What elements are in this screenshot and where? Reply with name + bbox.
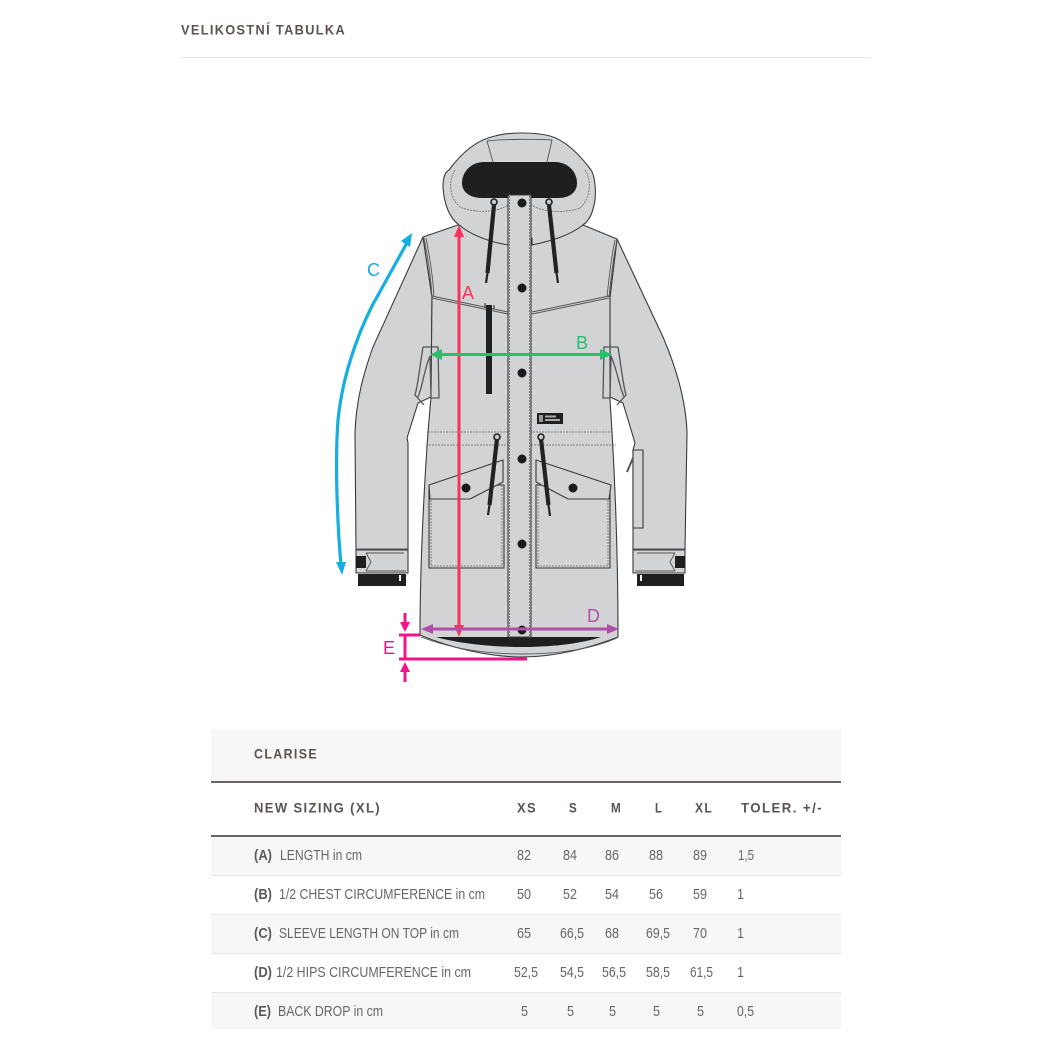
hood <box>443 133 595 245</box>
title: VELIKOSTNÍ TABULKA <box>181 22 346 38</box>
table name band: CLARISE <box>254 746 318 762</box>
row A: 82 <box>517 847 531 864</box>
buttons <box>462 198 578 634</box>
row D <box>254 964 744 981</box>
column header row <box>211 781 841 837</box>
left sleeve <box>355 237 432 586</box>
arrow A: length <box>454 225 474 637</box>
row C: SLEEVE LENGTH ON TOP in cm <box>279 925 459 942</box>
arrow D: hips: D <box>587 606 600 626</box>
column header row: L <box>655 800 663 816</box>
hem <box>421 637 617 654</box>
left side tab <box>415 347 439 405</box>
front placket <box>508 195 531 637</box>
arrow E: back drop <box>383 613 527 682</box>
arrow B: chest: B <box>576 333 588 353</box>
jacket illustration <box>355 133 687 657</box>
column header row: XS <box>517 800 537 816</box>
row E: 0,5 <box>737 1003 754 1020</box>
row E: (E) <box>254 1004 271 1020</box>
row B: 54 <box>605 886 619 903</box>
row C: 70 <box>693 925 707 942</box>
row A <box>211 837 841 875</box>
right side tab <box>603 347 626 405</box>
row C: (C) <box>254 926 272 942</box>
chest zip <box>485 303 494 394</box>
row B: 52 <box>563 886 577 903</box>
row D: 52,5 <box>514 964 538 981</box>
row E: 5 <box>567 1003 574 1020</box>
row C: 68 <box>605 925 619 942</box>
row D: 56,5 <box>602 964 626 981</box>
jacket body <box>420 225 618 657</box>
row A: (A) <box>254 848 272 864</box>
row B: 59 <box>693 886 707 903</box>
row D: (D) <box>254 965 272 981</box>
row A: LENGTH in cm <box>280 847 362 864</box>
row D: 61,5 <box>690 964 713 981</box>
row B: 1 <box>737 886 744 903</box>
row D: 58,5 <box>646 964 670 981</box>
brand label <box>537 413 563 424</box>
row D: 54,5 <box>560 964 584 981</box>
column header row: M <box>611 800 622 816</box>
arrow D: hips <box>421 606 619 634</box>
row A: 88 <box>649 847 663 864</box>
row A: 86 <box>605 847 619 864</box>
arrow A: length: A <box>462 283 474 303</box>
arrow B: chest <box>430 333 612 360</box>
arrow E: back drop: E <box>383 638 395 658</box>
right sleeve <box>610 239 687 586</box>
right pocket <box>536 460 611 568</box>
row E: 5 <box>653 1003 660 1020</box>
row C <box>211 915 841 953</box>
column header row: TOLER. +/- <box>741 800 823 816</box>
row A: 84 <box>563 847 577 864</box>
row D: 1 <box>737 964 744 981</box>
column header row: XL <box>695 800 713 816</box>
table name band <box>211 729 841 781</box>
size table <box>211 729 841 1029</box>
row C: 65 <box>517 925 531 942</box>
row A: 89 <box>693 847 707 864</box>
row B: 56 <box>649 886 663 903</box>
row B: 1/2 CHEST CIRCUMFERENCE in cm <box>279 886 485 903</box>
row B <box>254 886 744 903</box>
row A: 1,5 <box>738 847 754 864</box>
row C: 66,5 <box>560 925 584 942</box>
seams <box>424 238 617 445</box>
column header row: NEW SIZING (XL) <box>254 800 381 816</box>
row D: 1/2 HIPS CIRCUMFERENCE in cm <box>276 964 471 981</box>
row E: 5 <box>609 1003 616 1020</box>
arrow C: sleeve <box>336 233 412 575</box>
row B: (B) <box>254 887 272 903</box>
lower drawstrings <box>488 434 550 516</box>
left pocket <box>429 460 504 568</box>
row B: 50 <box>517 886 531 903</box>
chest drawstrings <box>486 199 558 283</box>
column header row: S <box>569 800 578 816</box>
row C: 1 <box>737 925 744 942</box>
arrow C: sleeve: C <box>367 260 380 280</box>
row E <box>211 993 841 1029</box>
row E: 5 <box>521 1003 528 1020</box>
row C: 69,5 <box>646 925 670 942</box>
row E: 5 <box>697 1003 704 1020</box>
row E: BACK DROP in cm <box>278 1003 383 1020</box>
